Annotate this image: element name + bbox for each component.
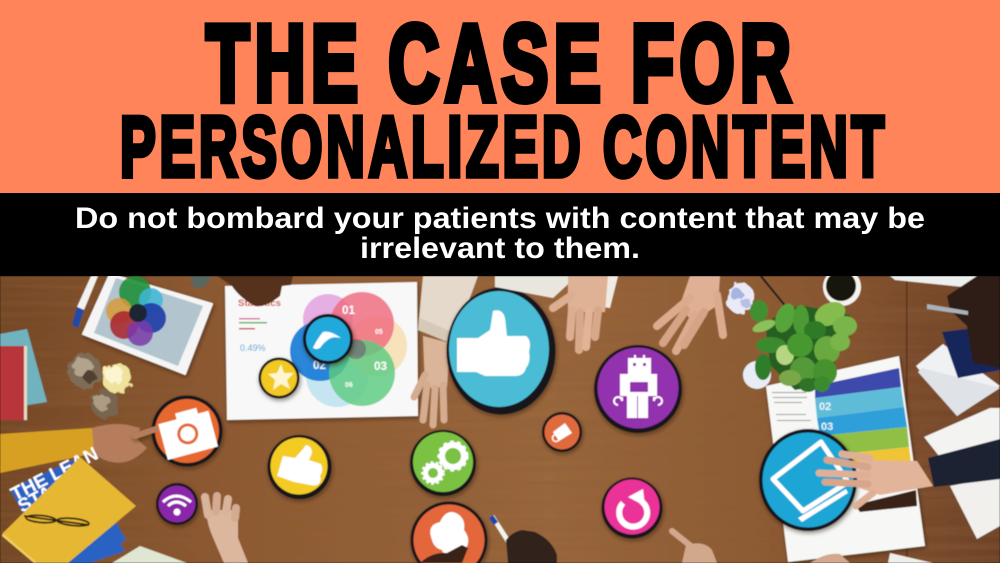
document bands [815,368,917,512]
badge: blue tablet [759,429,857,531]
pale hand bottom left [205,496,248,563]
printed venn chart paper [225,282,418,420]
dark hand with pen [927,276,1000,368]
cream sleeve and hand [414,276,478,425]
marker pen [72,276,98,328]
small gear [422,462,444,484]
document body lines [772,392,811,421]
coffee cup [822,276,862,307]
venn circles: 05 [375,329,383,336]
badge: large blue thumbs up [446,288,556,414]
pointing hand bottom [672,531,717,563]
orange title banner [0,0,1000,195]
top dark hand [190,276,293,306]
leafy plant [743,297,857,392]
dark hand over cloud badge [420,545,468,563]
glasses [24,514,89,527]
badge: yellow star [258,358,300,398]
blue book underneath: STA [15,482,57,517]
tablet with venn chart [83,274,212,374]
yellow notebook with glasses [2,457,136,563]
badge: orange cloud [410,502,488,563]
venn circles: 02 [313,358,326,372]
blue book underneath: THE LEAN [8,444,102,505]
document bands: 02 [819,401,831,413]
colourful document [766,356,925,562]
paper bars [239,318,267,330]
badge: pink refresh [602,478,662,538]
badge: camera [135,396,222,466]
venn circles [290,292,407,407]
marker over cloud badge [489,515,518,555]
large gear [439,442,467,470]
bottom hand and paper [810,553,933,563]
yellow sleeve arm with hand [0,424,147,473]
open hand one [553,276,608,350]
venn circles: 06 [345,382,353,389]
dark plaid sleeve [928,439,1000,487]
crumpled paper balls [68,354,132,418]
top left paper and cuff [495,276,618,308]
paper percentage: 0.49% [240,343,266,353]
badge: orange mug [542,412,582,452]
venn circles: 03 [374,359,387,373]
dark hand bottom centre [506,530,557,563]
subtitle line 1: Do not bombard your patients with content that may be [75,202,925,235]
photo: team around wooden table [0,268,1000,563]
title line 2: PERSONALIZED CONTENT [120,101,884,195]
open hand two [657,276,723,351]
black subtitle band [0,193,1000,276]
paper heading: Statistics [238,298,281,308]
badge: yellow thumbs up [268,435,332,499]
badge: purple robot [594,345,682,433]
hand on tablet badge [819,454,933,506]
black pen [760,276,786,306]
badge: wifi [156,483,198,525]
badge: blue bird [303,314,353,364]
venn circles: 01 [342,303,355,317]
title line 1: THE CASE FOR [206,3,791,124]
blue book underneath [8,444,126,563]
bottom paper scrap [112,546,187,563]
document bands: 03 [821,421,833,433]
subtitle line 2: irrelevant to them. [360,232,640,265]
crumpled blue paper [725,283,755,313]
badge: green gears [410,430,476,496]
right stack of papers [890,276,1000,539]
books at left [0,329,47,420]
wooden table [0,276,1000,563]
